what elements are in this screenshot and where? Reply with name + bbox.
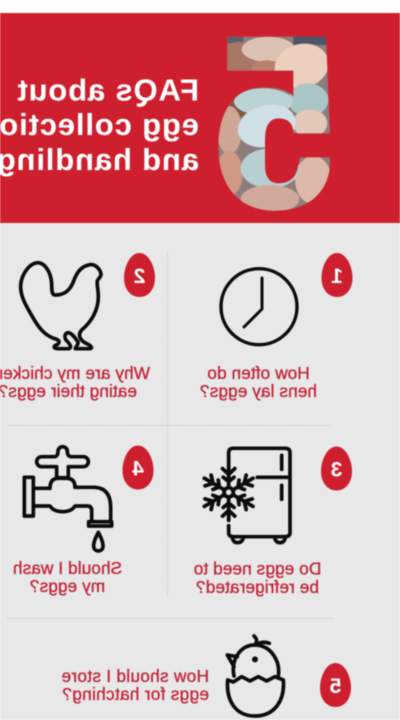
icon: fridge with snowflake <box>201 448 290 543</box>
question text 5: How should I store <box>61 666 209 686</box>
badge 5: 5 <box>329 675 341 698</box>
panel: question 4 <box>13 446 154 596</box>
badge 5 <box>320 663 351 707</box>
badge 2: 2 <box>134 265 145 288</box>
question text 4 <box>13 558 122 596</box>
question text 3: Do eggs need to <box>194 558 321 578</box>
question text 3 <box>194 558 321 597</box>
question text 4: my eggs? <box>30 576 105 596</box>
icon: clock <box>221 269 297 345</box>
badge 3: 3 <box>331 458 342 482</box>
panel: question 5 <box>61 636 351 716</box>
badge 3 <box>321 446 352 490</box>
question text 3: be refrigerated? <box>196 577 319 597</box>
question text 4: Should I wash <box>13 558 122 578</box>
background panel <box>0 223 400 720</box>
question text 1: hens lay eggs? <box>200 381 317 401</box>
question text 2 <box>0 363 150 401</box>
icon: chicken <box>21 263 101 349</box>
title <box>0 72 199 177</box>
big numeral 5 filled with eggs <box>218 36 331 212</box>
panel: question 2 <box>0 253 155 401</box>
snowflake <box>201 464 256 520</box>
question text 5 <box>61 666 209 704</box>
badge 4 <box>122 446 154 490</box>
badge 1 <box>322 253 352 297</box>
question text 1 <box>200 363 317 401</box>
badge 2 <box>124 253 155 297</box>
panel: question 3 <box>194 446 352 597</box>
title: and handling <box>0 142 199 177</box>
question text 1: How often do <box>207 363 310 383</box>
panel: question 1 <box>200 253 352 401</box>
badge 1: 1 <box>331 265 343 288</box>
title: FAQs about <box>17 72 199 108</box>
icon: dripping tap <box>24 447 112 551</box>
question text 5: eggs for hatching? <box>62 684 209 704</box>
badge 4: 4 <box>132 458 144 480</box>
panel: red header <box>0 13 400 223</box>
icon: hatching chick <box>227 636 284 716</box>
question text 2: eating their eggs? <box>0 381 137 401</box>
